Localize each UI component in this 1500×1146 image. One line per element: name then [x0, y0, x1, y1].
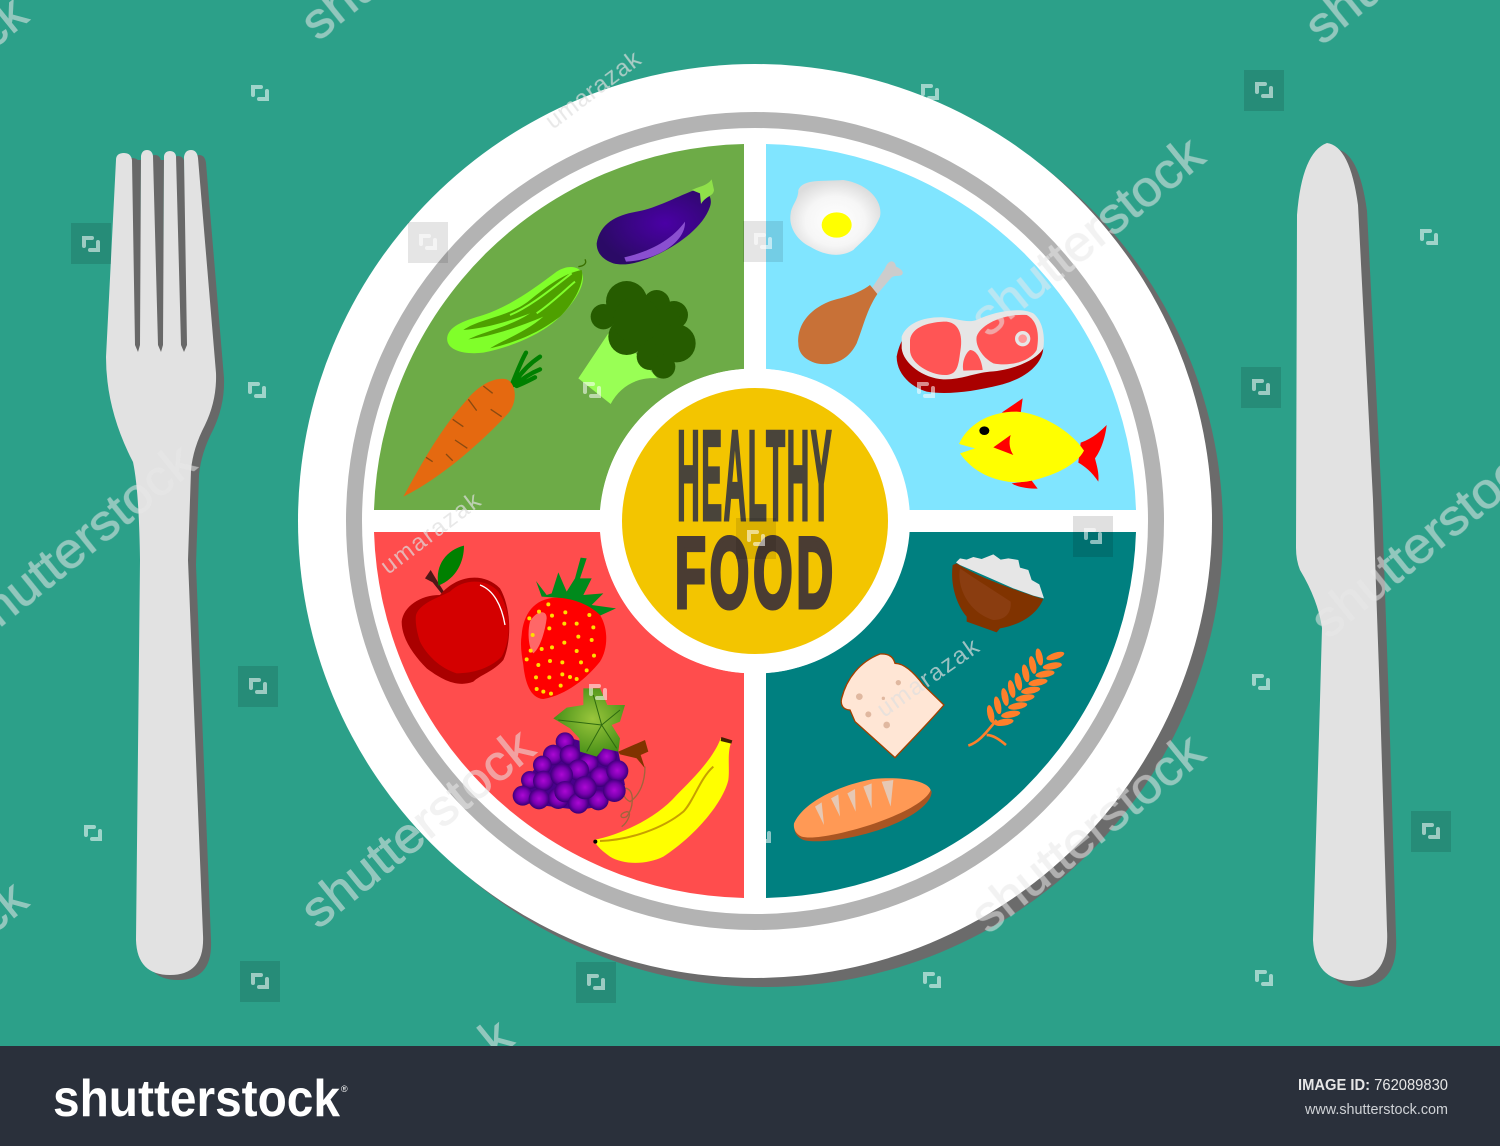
- watermark: corner marks: [84, 84, 1438, 988]
- icon: wheat ear: [968, 648, 1065, 746]
- plate shadow: [309, 73, 1223, 987]
- icon: apple: [402, 546, 509, 684]
- icon: bread slice: [841, 654, 944, 758]
- fruit illustrations: [402, 546, 732, 863]
- footer background: [0, 1046, 1500, 1146]
- watermark: contributor name: umarazak: [540, 45, 647, 135]
- vegetables illustrations: [403, 179, 714, 497]
- icon: chicken leg: [798, 261, 903, 364]
- watermark: contributor name: [375, 45, 985, 723]
- knife shadow: [1305, 149, 1396, 987]
- icon: eggplant: [597, 179, 714, 264]
- centre white ring: [600, 368, 910, 674]
- grains illustrations: [794, 554, 1065, 841]
- title line: FOOD: FOOD: [675, 517, 837, 628]
- icon: broccoli: [578, 281, 696, 404]
- watermark: contributor name: umarazak: [375, 487, 487, 580]
- icon: cucumber: [447, 259, 586, 353]
- plate grey ring: [354, 120, 1156, 922]
- plate: [298, 64, 1223, 987]
- icon: fried egg: [790, 180, 880, 255]
- quadrant: vegetables: [374, 144, 744, 510]
- footer url: www.shutterstock.com: [1304, 1101, 1448, 1118]
- footer registered mark: ®: [341, 1084, 348, 1094]
- fork shadow: [114, 155, 224, 980]
- watermark: tile squares: [71, 70, 1451, 1003]
- fork tine gaps: [131, 160, 187, 350]
- watermark: shutterstock text: k: [469, 1007, 523, 1067]
- icon: carrot: [403, 353, 540, 497]
- fork: [106, 150, 224, 980]
- icon: baguette: [794, 778, 932, 841]
- watermark: contributor name: umarazak: [872, 633, 985, 723]
- fork body: [106, 150, 216, 975]
- quadrant: grains: [766, 532, 1136, 898]
- centre yellow badge: [622, 388, 888, 654]
- knife: [1296, 143, 1396, 987]
- plate rim: [298, 64, 1212, 978]
- icon: strawberry: [521, 558, 616, 699]
- icon: grapes: [513, 688, 648, 827]
- text: HEALTHY: [677, 404, 833, 548]
- title: [675, 404, 837, 628]
- quadrant: fruits: [374, 532, 744, 898]
- footer image id: IMAGE ID: 762089830: [1298, 1077, 1448, 1094]
- footer bar: [0, 1046, 1500, 1146]
- icon: rice bowl: [952, 554, 1044, 632]
- watermark: shutterstock text: shutterstock: [290, 717, 545, 939]
- icon: steak: [897, 310, 1044, 393]
- footer logo: shutterstock: [53, 1070, 340, 1128]
- protein illustrations: [790, 180, 1107, 489]
- icon: fish: [959, 398, 1107, 489]
- knife body: [1296, 143, 1387, 981]
- watermark: shutterstock text: shutterstock: [960, 125, 1215, 347]
- quadrant: protein: [766, 144, 1136, 510]
- watermark: shutterstock text: shutterstock: [960, 722, 1215, 944]
- icon: banana: [593, 737, 732, 863]
